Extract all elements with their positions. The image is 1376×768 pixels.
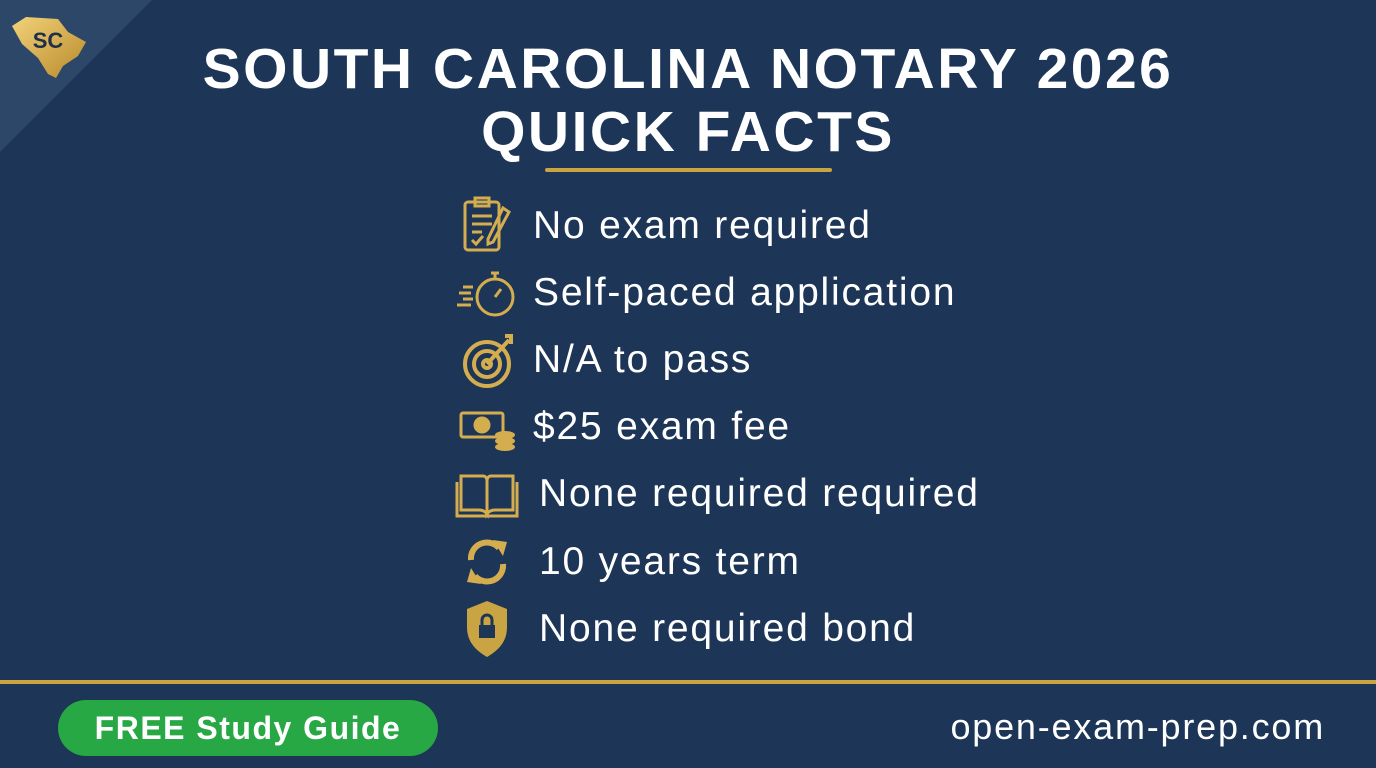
background corner triangle bbox=[0, 0, 152, 152]
title underline bbox=[545, 168, 832, 172]
item: no exam: No exam required bbox=[533, 204, 872, 247]
item: book: None required required bbox=[539, 472, 980, 515]
item: fee: $25 exam fee bbox=[533, 405, 791, 448]
item: bond bbox=[467, 601, 916, 657]
logo: SC state badge bbox=[12, 17, 86, 78]
title bbox=[203, 37, 1173, 164]
title: QUICK FACTS bbox=[481, 100, 895, 164]
item: term: 10 years term bbox=[539, 540, 801, 583]
logo: SC state badge: SC bbox=[33, 28, 63, 53]
item: no exam bbox=[464, 196, 872, 252]
item: bond: None required bond bbox=[539, 607, 916, 650]
website url: open-exam-prep.com bbox=[950, 706, 1325, 747]
button: free study guide bbox=[58, 700, 438, 756]
title: SOUTH CAROLINA NOTARY 2026 bbox=[203, 37, 1173, 101]
divider line bbox=[0, 680, 1376, 684]
button: free study guide: FREE Study Guide bbox=[95, 710, 401, 746]
item: target: N/A to pass bbox=[533, 338, 752, 381]
item: target bbox=[463, 334, 752, 388]
item: self-paced: Self-paced application bbox=[533, 271, 956, 314]
